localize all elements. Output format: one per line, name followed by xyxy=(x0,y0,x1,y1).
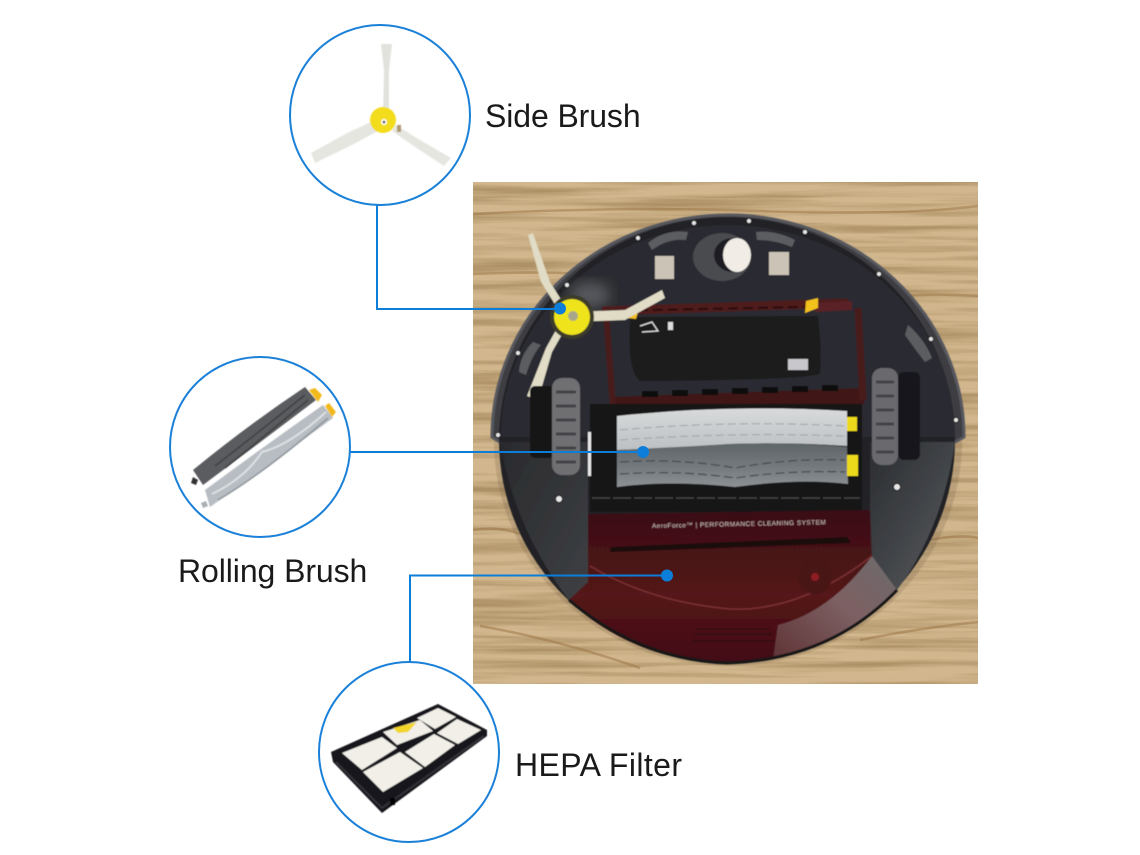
panel: robot photo xyxy=(473,182,978,684)
lower side panels xyxy=(500,442,955,600)
connector: side brush xyxy=(377,205,566,314)
icon: rolling brushes xyxy=(191,387,336,508)
inner body xyxy=(501,225,955,437)
rim screws xyxy=(496,218,958,502)
glossy highlight xyxy=(570,282,610,308)
icon: side brush xyxy=(311,44,451,166)
drop shadow xyxy=(494,440,962,666)
wood floor background xyxy=(473,182,978,684)
connector: rolling brush xyxy=(350,446,649,458)
connector: HEPA filter xyxy=(410,570,673,662)
label: HEPA filter: HEPA Filter xyxy=(515,747,682,783)
callout: HEPA filter circle xyxy=(319,662,499,842)
dust bin xyxy=(570,510,896,662)
label: side brush: Side Brush xyxy=(485,98,641,134)
upper shell xyxy=(492,215,964,442)
icon: HEPA filter xyxy=(331,704,487,813)
caster wheel xyxy=(693,233,752,281)
dust bin outer edge xyxy=(569,590,897,663)
drive wheels xyxy=(530,368,920,475)
bin label: AeroForce™ | PERFORMANCE CLEANING SYSTEM xyxy=(652,519,826,530)
callout: side brush circle xyxy=(290,25,470,205)
brush deck frame xyxy=(602,298,864,408)
callout: rolling brush circle xyxy=(170,357,350,537)
robot vacuum underside xyxy=(492,215,964,680)
side brush on robot xyxy=(527,233,665,400)
sensor pads xyxy=(655,252,789,279)
roller bay xyxy=(590,404,862,512)
sensor windows xyxy=(519,231,932,375)
lower shell xyxy=(499,217,955,663)
label: rolling brush: Rolling Brush xyxy=(178,553,367,589)
rolling brushes xyxy=(588,408,858,487)
